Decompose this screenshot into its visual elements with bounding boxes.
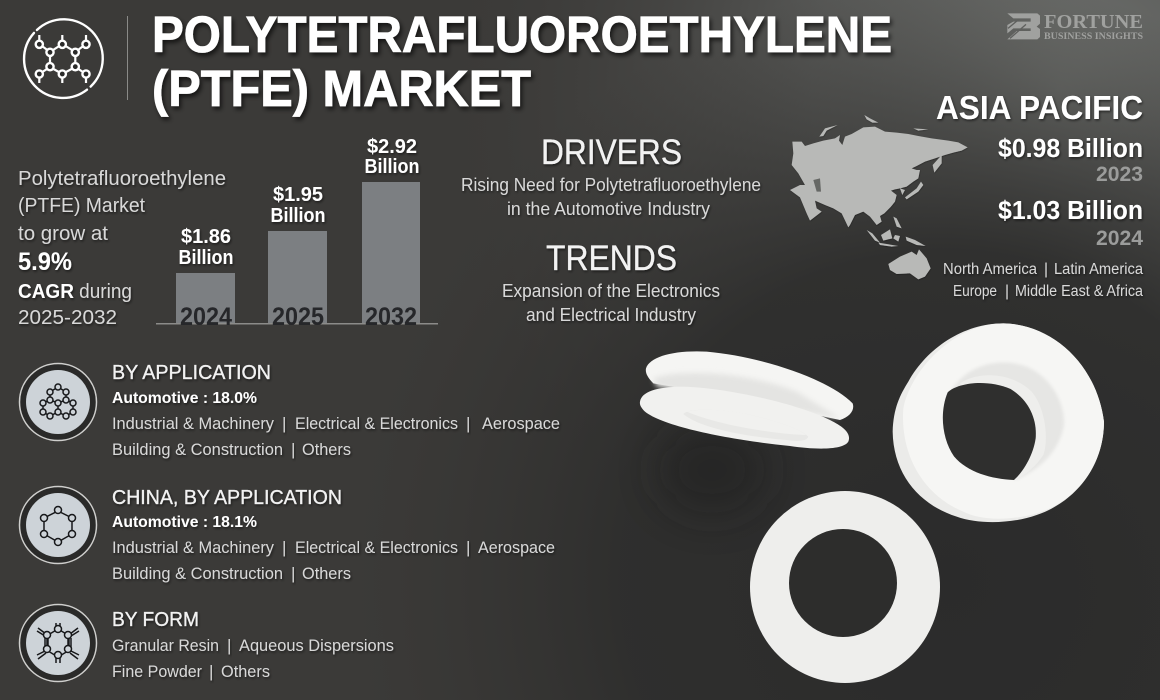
asia pacific values: $0.98 Billion [998,135,1143,163]
china application list: | [282,538,286,557]
section: by application [20,362,560,459]
other regions: Middle East & Africa [1015,283,1143,300]
china application list: Electrical & Electronics [295,538,458,557]
application list: Aerospace [482,414,560,433]
title [152,6,892,117]
icon: double-bond hexagon [20,604,96,682]
form list [112,636,394,681]
other regions: | [1005,283,1009,300]
icon: hexagon ring [20,486,96,564]
CAGR text block: CAGR during [18,280,132,303]
other regions: North America [943,261,1037,278]
other regions [943,261,1143,300]
bar chart: $1.86 [181,226,231,248]
section: by application: Automotive : 18.0% [112,390,257,407]
bar chart: 2024 [180,303,232,331]
application list: | [282,414,286,433]
asia pacific values: $1.03 Billion [998,197,1143,225]
form list: Aqueous Dispersions [239,636,394,655]
form list: Granular Resin [112,636,219,655]
CAGR text block: 5.9% [18,248,72,276]
china application list: Building & Construction [112,564,283,583]
application list: Electrical & Electronics [295,414,458,433]
section: china, by application [20,486,555,583]
form list: Fine Powder [112,662,202,681]
china application list: Aerospace [478,538,555,557]
bar chart: $1.95 [273,184,323,206]
asia pacific values: 2023 [1096,163,1143,186]
ring: flat washer [750,491,940,683]
trends [502,239,720,325]
drivers: in the Automotive Industry [507,199,710,219]
bar chart: Billion [364,156,420,178]
application list: | [291,440,295,459]
other regions: Latin America [1054,261,1143,278]
application list: Building & Construction [112,440,283,459]
bar chart: Billion [178,247,234,269]
CAGR text block: to grow at [18,222,108,245]
application list: Industrial & Machinery [112,414,274,433]
form list: | [227,636,231,655]
bar chart: Billion [270,205,326,227]
asia pacific values: ASIA PACIFIC [936,89,1143,126]
photo: PTFE rings [640,323,1104,683]
china application list: Others [302,564,351,583]
logo: Fortune Business Insights [1007,11,1143,42]
other regions: | [1044,261,1048,278]
drivers [461,133,761,219]
section: china, by application: Automotive : 18.1% [112,514,257,531]
logo: Fortune Business Insights: FORTUNE [1044,11,1143,33]
trends: and Electrical Industry [526,305,696,325]
application list: | [466,414,470,433]
section: by application: BY APPLICATION [112,362,271,384]
CAGR text block: (PTFE) Market [18,194,145,217]
drivers: DRIVERS [541,133,682,172]
bar chart: 2032 [365,303,417,331]
bar chart [156,136,438,331]
china application list: | [466,538,470,557]
asia pacific values [936,89,1143,250]
application list [112,414,560,459]
form list: Others [221,662,270,681]
section: by form: BY FORM [112,609,199,631]
asia pacific values: 2024 [1096,227,1143,250]
divider [127,16,128,100]
section: china, by application: CHINA, BY APPLICATION [112,487,342,509]
ring: tilted pair [640,351,853,449]
section: by form [20,604,394,682]
CAGR text block: 2025-2032 [18,306,117,329]
icon: molecule cluster [20,364,96,440]
logo: Fortune Business Insights: BUSINESS INSIGHTS [1044,32,1143,42]
other regions: Europe [953,283,997,300]
ring: stacked washers [893,323,1104,522]
trends: TRENDS [546,239,677,278]
trends: Expansion of the Electronics [502,281,720,301]
china application list: | [291,564,295,583]
form list: | [209,662,213,681]
drivers: Rising Need for Polytetrafluoroethylene [461,175,761,195]
map: Asia Pacific [790,115,968,279]
bar chart: $2.92 [367,136,417,158]
CAGR text block: Polytetrafluoroethylene [18,167,226,190]
title: POLYTETRAFLUOROETHYLENE [152,6,892,63]
china application list: Industrial & Machinery [112,538,274,557]
icon: molecule logo [24,19,103,98]
CAGR text block [18,167,226,329]
title: (PTFE) MARKET [152,60,531,117]
china application list [112,538,555,583]
application list: Others [302,440,351,459]
bar chart: 2025 [272,303,324,331]
